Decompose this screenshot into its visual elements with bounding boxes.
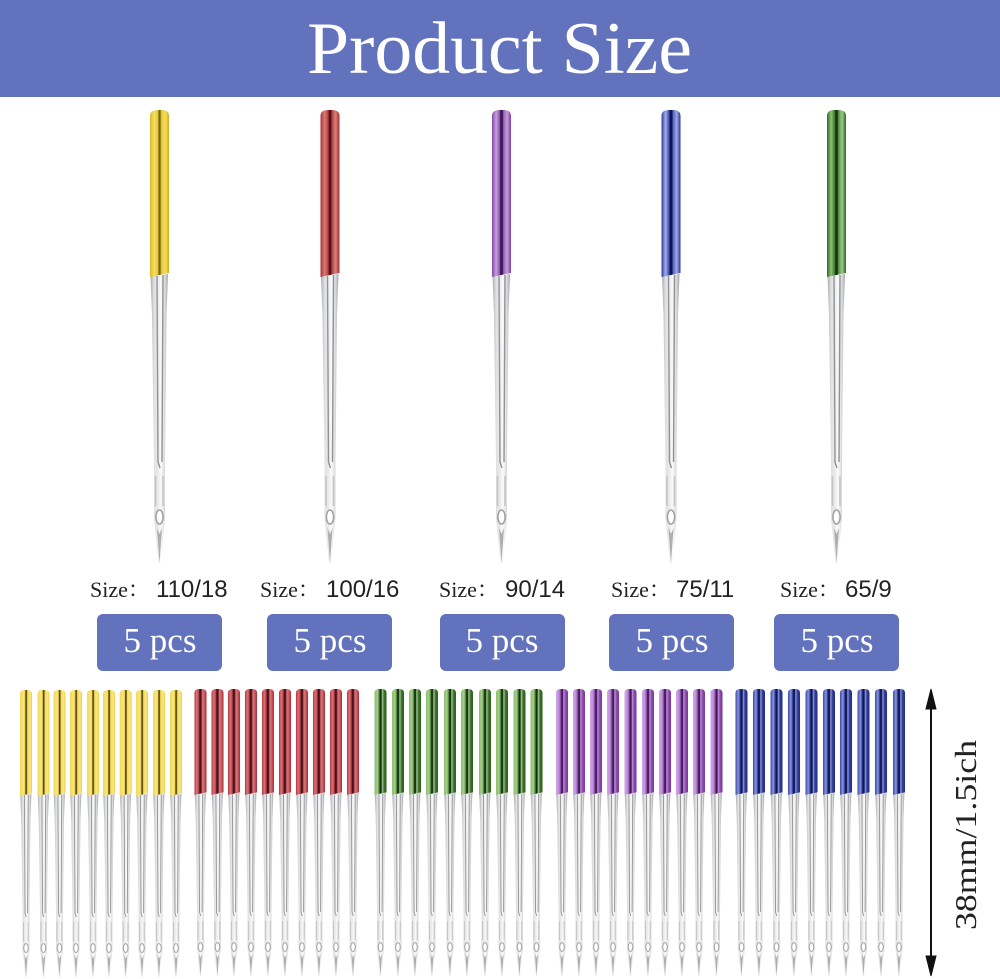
quantity badge 110/18: 5 pcs xyxy=(124,621,196,660)
size label 75/11: Size： xyxy=(611,577,671,602)
needle 65/9 green xyxy=(827,110,846,563)
quantity badge 100/16: 5 pcs xyxy=(294,621,366,660)
yellow needle set xyxy=(20,690,182,977)
quantity badge 65/9 xyxy=(774,614,899,671)
quantity badge 90/14 xyxy=(440,614,565,671)
quantity badge 90/14: 5 pcs xyxy=(466,621,538,660)
title banner xyxy=(0,0,1000,97)
size label 65/9: 65/9 xyxy=(845,576,892,603)
size label 110/18: 110/18 xyxy=(156,576,228,603)
size label 90/14: 90/14 xyxy=(505,576,565,603)
needle 90/14 purple xyxy=(492,110,511,563)
size label 110/18: Size： xyxy=(90,577,150,602)
arrow: needle length xyxy=(926,689,936,976)
needle 100/16 red xyxy=(320,110,340,563)
size label 65/9: Size： xyxy=(780,577,840,602)
red needle set xyxy=(194,689,359,976)
quantity badge 75/11: 5 pcs xyxy=(636,621,708,660)
size label 100/16: 100/16 xyxy=(326,576,399,603)
purple needle set xyxy=(556,689,723,976)
needle 110/18 yellow xyxy=(150,110,169,563)
title: Product Size xyxy=(307,8,692,90)
quantity badge 100/16 xyxy=(267,614,392,671)
size label 90/14: Size： xyxy=(439,577,499,602)
blue needle set xyxy=(735,689,905,976)
size label 75/11: 75/11 xyxy=(676,576,734,603)
green needle set xyxy=(374,689,543,976)
quantity badge 65/9: 5 pcs xyxy=(801,621,873,660)
length label: 38mm/1.5ich xyxy=(948,739,983,930)
size label 100/16: Size： xyxy=(260,577,320,602)
quantity badge 75/11 xyxy=(609,614,734,671)
quantity badge 110/18 xyxy=(97,614,222,671)
needle 75/11 blue xyxy=(662,110,680,563)
